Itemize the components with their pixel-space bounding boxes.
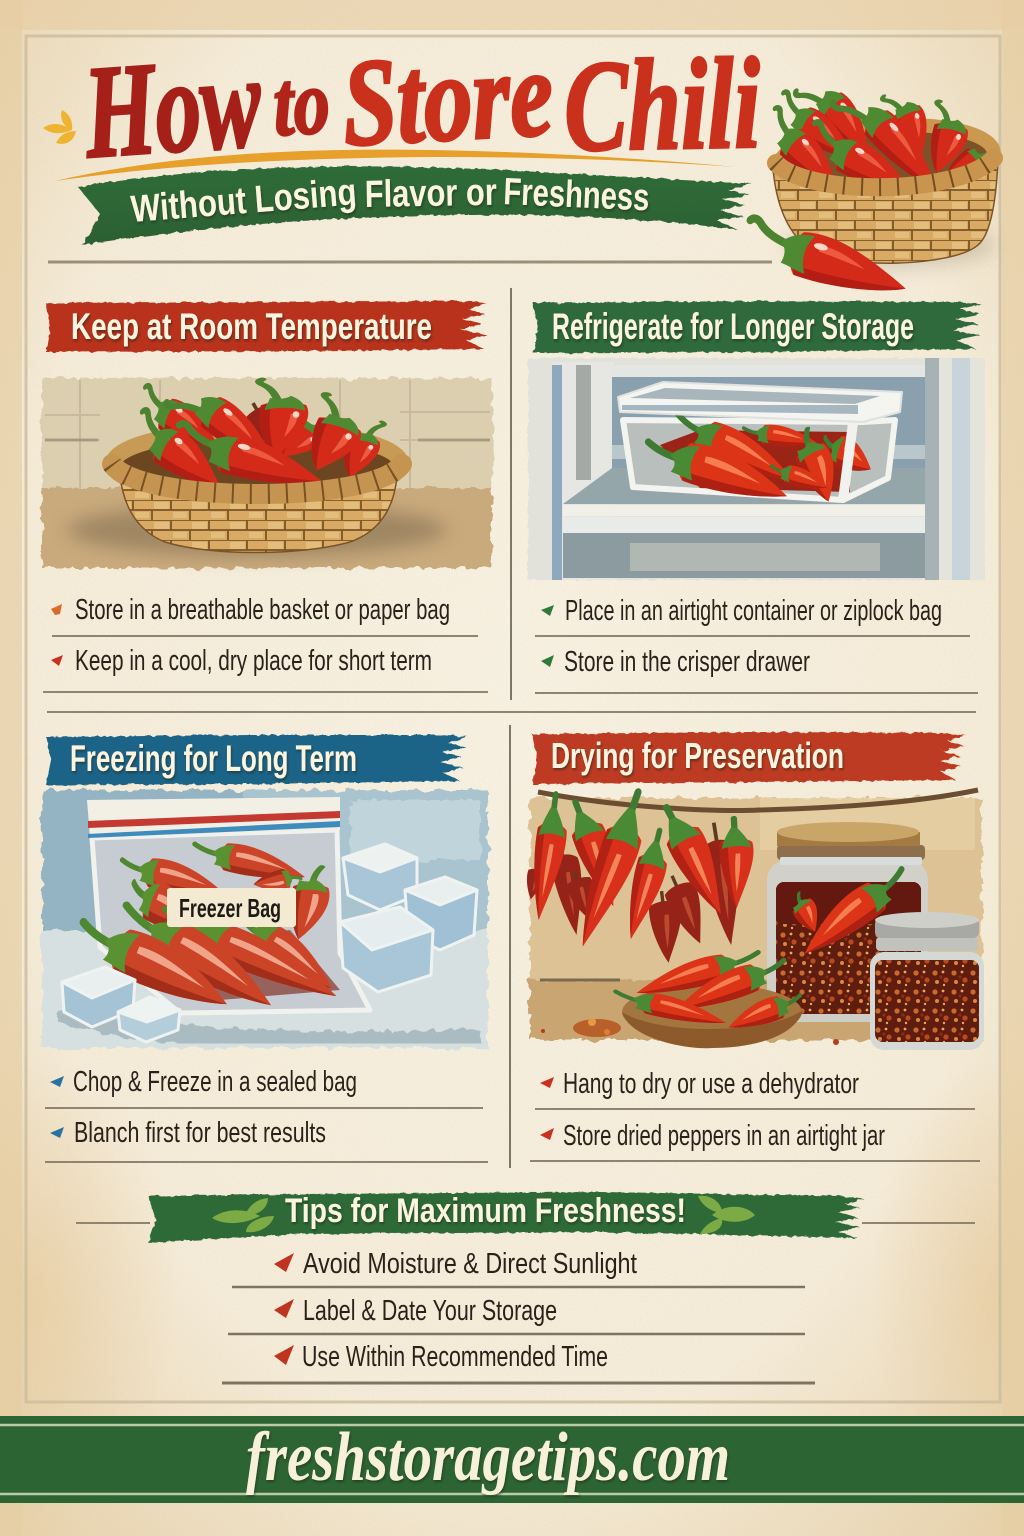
bullet list: drying: Store dried peppers in an airtight jar: [563, 1120, 885, 1152]
small jar: [870, 912, 984, 1050]
illustration: container in fridge: [528, 358, 985, 580]
illustration: freezer bag with ice: [42, 790, 488, 1048]
panel: tips: [76, 1192, 975, 1383]
bullet list: drying: Hang to dry or use a dehydrator: [563, 1068, 859, 1100]
large jar: [767, 822, 928, 1022]
subtitle: [129, 171, 650, 231]
panel: refrigerate: [528, 301, 985, 693]
bullet list: freezing: Chop & Freeze in a sealed bag: [73, 1066, 357, 1098]
subtitle ribbon: [78, 166, 752, 245]
footer band: [0, 1416, 1024, 1503]
title: to: [271, 50, 332, 155]
icon: ice cubes: [62, 844, 477, 1042]
heading banner: freezing: Freezing for Long Term: [70, 738, 357, 779]
panel: freezing: [42, 735, 488, 1162]
header divider: [48, 260, 772, 264]
title sprig icon: [43, 110, 76, 144]
title: [79, 24, 761, 186]
loose chili: [740, 217, 913, 303]
hanging chilies: [523, 787, 756, 964]
bullet list: room temperature: Store in a breathable basket or paper bag: [75, 594, 450, 626]
icon: header basket of chilies: [740, 68, 998, 303]
website url: freshstoragetips.com: [246, 1419, 730, 1496]
label: freezer bag: [167, 888, 296, 927]
tips list: [222, 1248, 815, 1383]
orange swoosh: [55, 150, 736, 181]
title: Chili: [563, 32, 761, 179]
title: How: [79, 27, 266, 186]
subtitle: Freshness: [503, 171, 650, 219]
tips list: Label & Date Your Storage: [303, 1295, 557, 1327]
heading banner: room temperature: Keep at Room Temperature: [71, 306, 432, 347]
subtitle: Flavor or: [364, 172, 497, 216]
bullet list: room temperature: [43, 594, 488, 692]
title: Store: [339, 24, 556, 172]
panel: drying: [523, 732, 984, 1161]
bullet list: refrigerate: Store in the crisper drawer: [564, 646, 810, 678]
bullet list: freezing: Blanch first for best results: [74, 1117, 326, 1149]
heading banner: tips: [148, 1192, 864, 1243]
heading banner: tips: Tips for Maximum Freshness!: [285, 1192, 686, 1230]
tips list: Use Within Recommended Time: [302, 1341, 608, 1373]
panel: keep at room temperature: [42, 301, 492, 692]
bullet list: freezing: [45, 1066, 488, 1162]
bullet list: room temperature: Keep in a cool, dry place for short term: [75, 645, 432, 677]
subtitle: Without Losing: [129, 171, 358, 231]
heading banner: drying: Drying for Preservation: [551, 735, 844, 776]
bowl of chilies: [613, 946, 805, 1048]
bullet list: drying: [530, 1068, 980, 1161]
bullet list: refrigerate: [535, 595, 978, 693]
tips list: Avoid Moisture & Direct Sunlight: [303, 1248, 637, 1280]
icon: leaves right: [698, 1196, 755, 1234]
section dividers: [510, 288, 511, 1168]
illustration: hanging chilies and jars: [523, 787, 984, 1050]
header: title and ribbon: [43, 24, 761, 245]
label: freezer bag: Freezer Bag: [179, 893, 281, 923]
illustration: basket at room temperature: [42, 373, 492, 568]
heading banner: room temperature: [46, 301, 487, 352]
icon: leaves left: [212, 1198, 274, 1232]
chili flakes: [541, 1018, 839, 1045]
